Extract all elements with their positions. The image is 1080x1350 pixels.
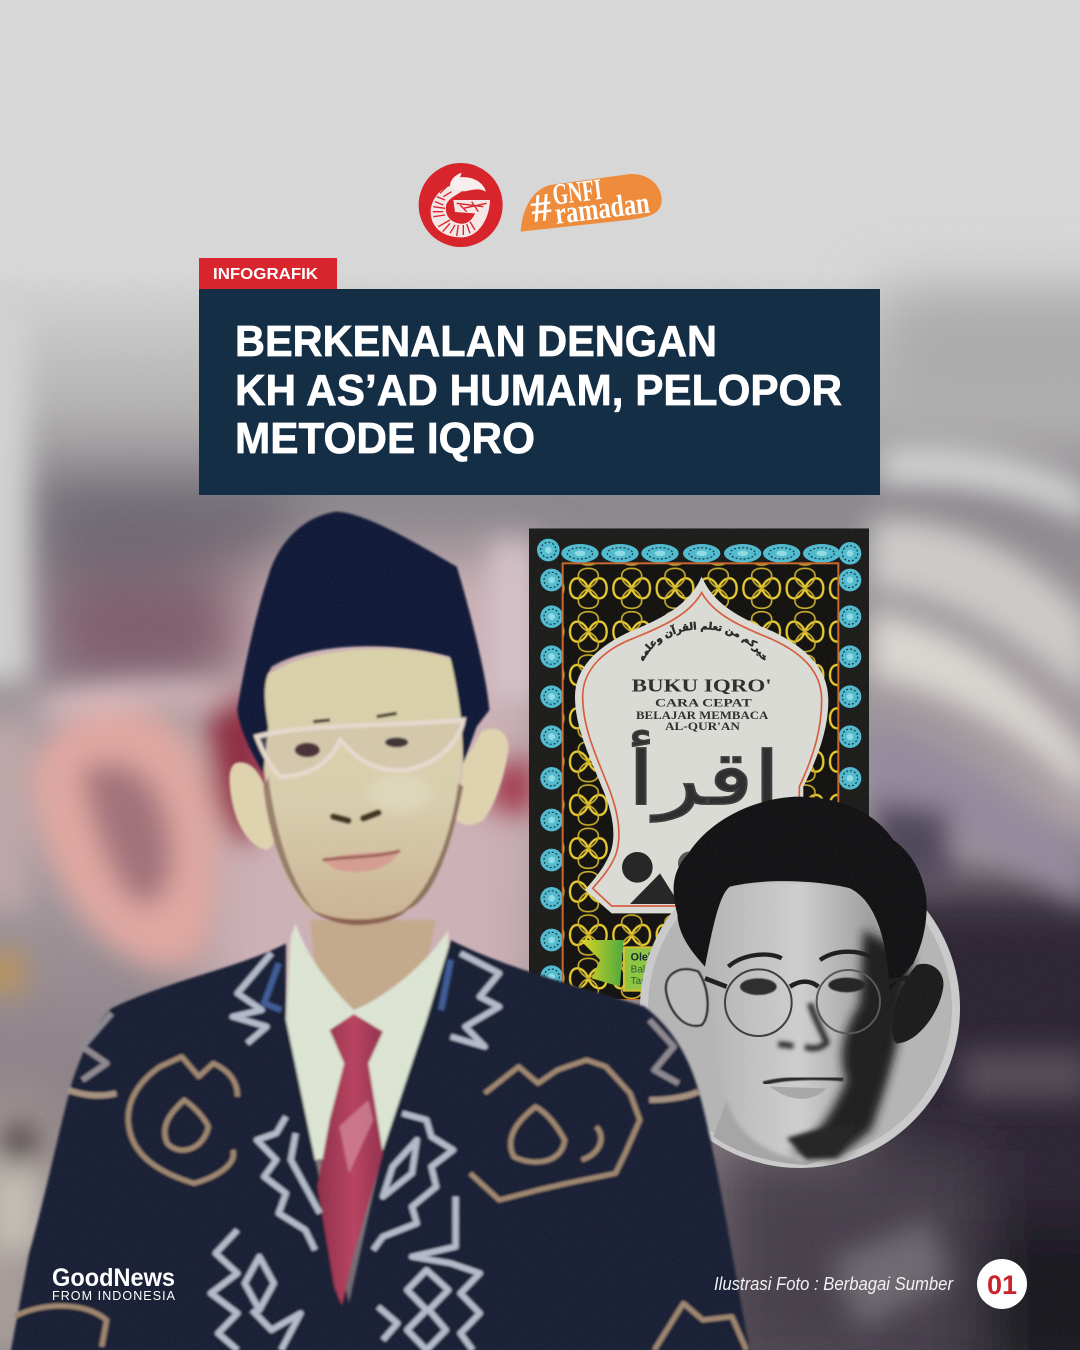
tag: INFOGRAFIK: INFOGRAFIK bbox=[213, 266, 318, 283]
badge: #GNFIramadan bbox=[521, 167, 662, 234]
logo: GoodNews from Indonesia: FROM INDONESIA bbox=[52, 1289, 176, 1303]
neck bbox=[310, 920, 436, 1013]
cheek shading bbox=[402, 783, 463, 912]
green ribbon label: Tam bbox=[631, 976, 650, 987]
book title: CARA CEPAT bbox=[655, 696, 752, 710]
suit jacket bbox=[11, 940, 750, 1350]
badge: #GNFIramadan: ramadan bbox=[553, 186, 651, 231]
necktie bbox=[317, 1014, 383, 1305]
main figure: KH As'ad Humam bbox=[11, 512, 750, 1350]
badge: #GNFIramadan: GNFI bbox=[551, 173, 604, 212]
lower arabic shapes bbox=[622, 851, 690, 904]
lips bbox=[770, 1087, 827, 1099]
tag: INFOGRAFIK bbox=[199, 258, 337, 289]
face bbox=[708, 881, 892, 1161]
peci hat bbox=[237, 512, 489, 773]
page number: 01 bbox=[987, 1270, 1017, 1300]
title text: KH AS’AD HUMAM, PELOPOR bbox=[235, 366, 842, 415]
ears bbox=[892, 964, 943, 1043]
book title bbox=[632, 676, 772, 733]
portrait disc bbox=[644, 852, 956, 1164]
book title: BELAJAR MEMBACA bbox=[636, 708, 769, 722]
batik lapel zigzags bbox=[68, 953, 698, 1350]
neck bbox=[713, 1100, 843, 1165]
book title: AL-QUR'AN bbox=[665, 719, 740, 733]
hair bbox=[674, 797, 927, 990]
face bbox=[262, 649, 463, 920]
logo: GoodNews from Indonesia: GoodNews bbox=[52, 1264, 175, 1292]
arch shape bbox=[575, 577, 828, 913]
title text: METODE IQRO bbox=[235, 414, 535, 463]
nose bbox=[333, 813, 378, 821]
book title: BUKU IQRO' bbox=[632, 676, 772, 696]
badge: #GNFIramadan: # bbox=[528, 184, 554, 231]
calligraphy arc: خيركم من تعلم القرآن وعلمه bbox=[641, 622, 766, 662]
photo credit: Ilustrasi Foto : Berbagai Sumber bbox=[714, 1274, 954, 1294]
white shirt bbox=[286, 923, 448, 1160]
arabic word Iqra: اقرأ bbox=[628, 730, 780, 822]
lips bbox=[323, 850, 400, 872]
title text bbox=[235, 317, 842, 463]
eyebrows, eyes and glasses bbox=[705, 952, 913, 1036]
head bbox=[229, 512, 508, 925]
ears bbox=[229, 762, 275, 850]
green ribbon label: Bal bbox=[631, 965, 645, 976]
book cover: Buku Iqro bbox=[529, 528, 869, 1000]
title panel bbox=[199, 289, 880, 495]
arch red line bbox=[583, 593, 822, 906]
face shadow bbox=[790, 930, 913, 1158]
teal ornamental border bbox=[537, 539, 861, 988]
logo: GNFI red emblem bbox=[419, 163, 503, 247]
green ribbon label: Oleh bbox=[631, 952, 654, 964]
torso and batik suit bbox=[11, 920, 750, 1350]
title text: BERKENALAN DENGAN bbox=[235, 317, 717, 366]
golden knotwork panel bbox=[563, 563, 838, 1000]
inset portrait of young KH As'ad Humam bbox=[644, 797, 956, 1165]
eagle head bbox=[450, 173, 486, 192]
nose bbox=[778, 1003, 827, 1048]
eyes bbox=[295, 743, 320, 757]
batik lotus motifs bbox=[15, 1057, 746, 1350]
logo: GoodNews from Indonesia bbox=[52, 1264, 176, 1303]
glasses bbox=[257, 713, 463, 777]
green ribbon label bbox=[580, 940, 661, 991]
page number bbox=[977, 1259, 1027, 1309]
